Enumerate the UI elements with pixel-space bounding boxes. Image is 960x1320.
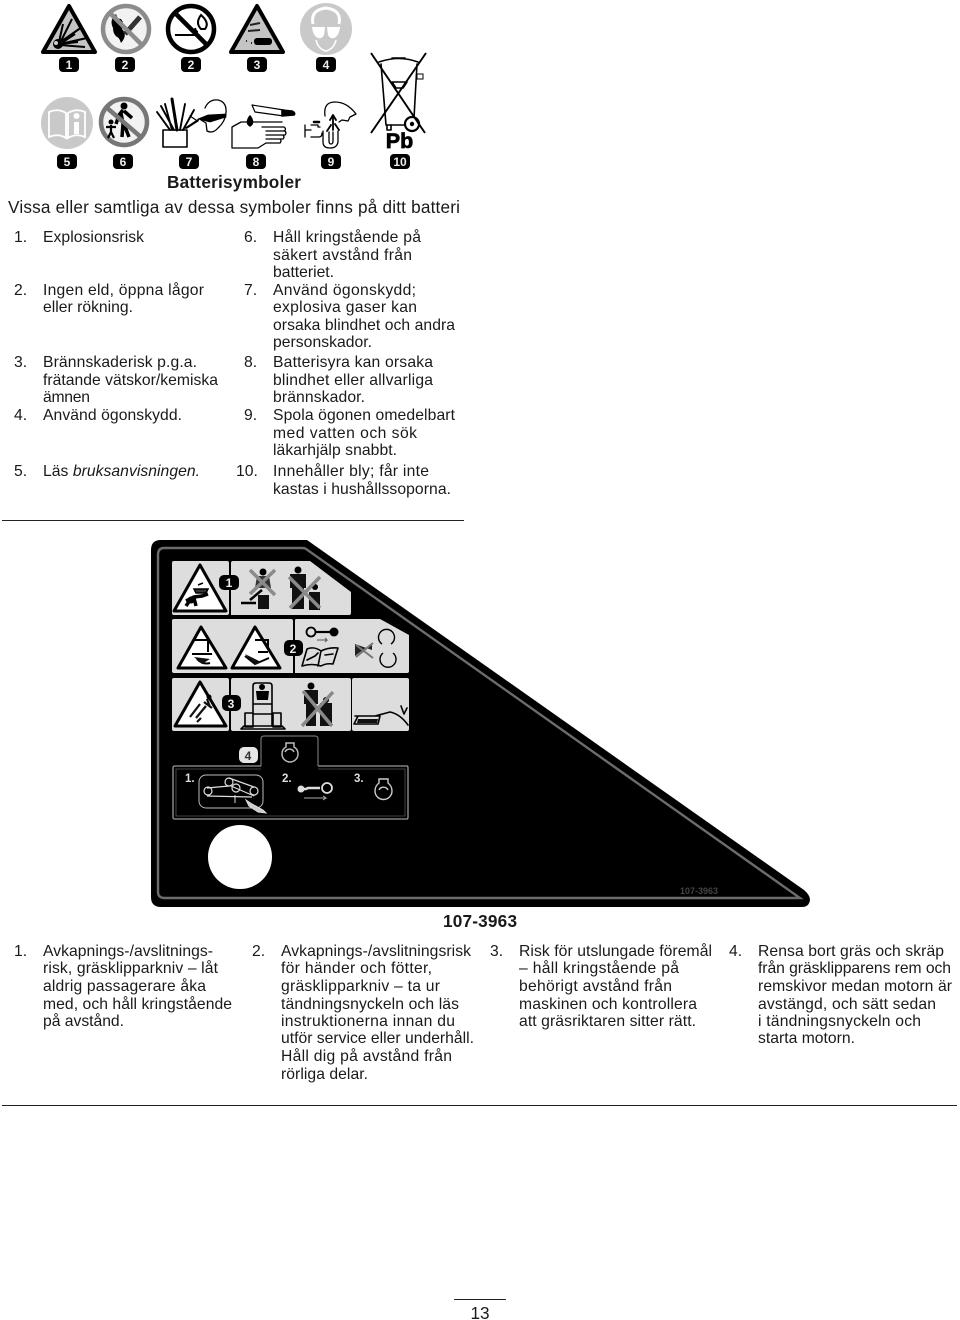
list: battery symbols right column: batteriet. <box>273 264 334 281</box>
decal list column 1: 1. <box>14 943 27 960</box>
decal list column 4: i tändningsnyckeln och <box>758 1013 921 1030</box>
decal list column 2 <box>252 943 474 1083</box>
badge row 2: 7 <box>186 155 193 169</box>
decal row 2 <box>172 619 409 673</box>
panel: decal 107-3963 <box>151 540 810 907</box>
decal row 3: 3 <box>228 697 235 711</box>
subheading: Vissa eller samtliga av dessa symboler finns på ditt batteri <box>8 197 460 217</box>
decal list column 3: Risk för utslungade föremål <box>519 942 712 960</box>
icon: acid burn on hand <box>232 105 295 148</box>
decal list column 2: Avkapnings-/avslitningsrisk <box>281 943 471 960</box>
decal list column 3: – håll kringstående på <box>519 959 679 977</box>
decal list column 1: Avkapnings-/avslitnings- <box>43 943 213 960</box>
list: battery symbols right column: säkert avstånd från <box>273 246 412 264</box>
badge row 1: 1 <box>66 58 73 72</box>
decal list column 2: Håll dig på avstånd från <box>281 1047 452 1065</box>
decal list column 3: att gräsriktaren sitter rätt. <box>519 1013 696 1030</box>
badge row 1: 2 <box>188 58 195 72</box>
list: battery symbols left column: Explosionsrisk <box>43 229 144 246</box>
list: battery symbols left column: 1. <box>14 229 27 246</box>
decal tab and badge 4 <box>239 736 318 766</box>
decal list column 3: 3. <box>490 943 503 960</box>
decal: starting instructions box: 2. <box>282 773 292 785</box>
list: battery symbols left column: Använd ögonskydd. <box>43 407 182 424</box>
list: battery symbols left column: 3. <box>14 354 27 371</box>
decal row 1 <box>172 561 351 615</box>
list: battery symbols left column: Ingen eld, öppna lågor <box>43 281 204 299</box>
list: battery symbols right column: med vatten och sök <box>273 425 417 442</box>
badge row 1: 4 <box>323 58 330 72</box>
list: battery symbols right column: orsaka blindhet och andra <box>273 317 455 334</box>
list: battery symbols right column: 6. <box>244 229 257 246</box>
icon: keep bystanders away <box>101 99 147 145</box>
heading: decal number: 107-3963 <box>443 911 517 931</box>
icon: no smoking circle <box>168 6 214 52</box>
list: battery symbols left column: 5. <box>14 463 27 480</box>
list: battery symbols right column: Håll kringstående på <box>273 228 421 246</box>
decal list column 1 <box>14 943 232 1030</box>
badge row 2: 9 <box>328 155 335 169</box>
list: battery symbols right column: 9. <box>244 407 257 424</box>
decal list column 4 <box>729 943 952 1047</box>
decal list column 4: starta motorn. <box>758 1030 855 1047</box>
list: battery symbols left column: Brännskaderisk p.g.a. <box>43 354 197 371</box>
decal list column 2: rörliga delar. <box>281 1066 368 1083</box>
icon: read manual <box>41 97 93 149</box>
list: battery symbols right column: personskador. <box>273 334 372 351</box>
list: battery symbols right column: brännskador. <box>273 389 365 406</box>
decal: starting instructions box <box>173 766 408 819</box>
icon: flush eyes with water <box>305 102 356 148</box>
badge row 1 <box>59 57 336 72</box>
list: battery symbols left column: eller rökning. <box>43 299 133 316</box>
icon: explosion risk triangle <box>43 6 95 52</box>
decal list column 2: 2. <box>252 943 265 960</box>
badge row 2: 5 <box>64 155 71 169</box>
list: battery symbols left column: frätande vätskor/kemiska <box>43 372 218 389</box>
icon: crossed out bin with Pb <box>371 53 426 153</box>
list: battery symbols right column: Använd ögonskydd; <box>273 282 416 299</box>
decal row 3 <box>172 678 409 731</box>
list: battery symbols right column: 10. <box>236 463 258 480</box>
badge row 2: 10 <box>393 155 407 169</box>
decal list column 3: behörigt avstånd från <box>519 977 672 995</box>
list: battery symbols right column: 7. <box>244 282 257 299</box>
icon: battery explosion and goggles <box>157 99 226 147</box>
decal list column 4: remskivor medan motorn är <box>758 978 952 995</box>
icon: corrosive triangle <box>231 6 283 52</box>
decal: starting instructions box: 3. <box>354 773 364 785</box>
decal list column 2: för händer och fötter, <box>281 960 432 977</box>
decal: starting instructions box: 1. <box>185 773 195 785</box>
badge row 1: 2 <box>122 58 129 72</box>
decal list column 3: maskinen och kontrollera <box>519 996 697 1013</box>
icon: crossed out bin with Pb: Pb <box>386 129 413 153</box>
list: battery symbols left column <box>14 229 218 480</box>
list: battery symbols left column: ämnen <box>43 389 90 406</box>
badge row 1: 3 <box>254 58 261 72</box>
decal tab and badge 4: 4 <box>245 749 252 763</box>
decal list column 2: instruktionerna innan du <box>281 1013 455 1030</box>
list: battery symbols right column: kastas i hushållssoporna. <box>273 480 451 498</box>
decal list column 4: avstängd, och sätt sedan <box>758 996 936 1013</box>
decal list column 2: tändningsnyckeln och läs <box>281 996 459 1013</box>
decal list column 1: på avstånd. <box>43 1012 124 1030</box>
decal: white circle <box>208 825 272 889</box>
decal row 1: 1 <box>226 576 233 590</box>
list: battery symbols right column: Batterisyra kan orsaka <box>273 354 433 371</box>
decal list column 1: aldrig passagerare åka <box>43 977 206 995</box>
decal part number: 107-3963 <box>680 886 718 896</box>
list: battery symbols right column: Innehåller bly; får inte <box>273 462 429 480</box>
decal list column 2: gräsklipparkniv – ta ur <box>281 978 440 995</box>
list: battery symbols right column: Spola ögonen omedelbart <box>273 407 456 424</box>
list: battery symbols left column: 2. <box>14 282 27 299</box>
decal list column 2: utför service eller underhåll. <box>281 1029 474 1047</box>
badge row 2: 6 <box>120 155 127 169</box>
decal list column 4: från gräsklipparens rem och <box>758 959 951 977</box>
icon: no open flame circle grey <box>103 6 149 52</box>
list: battery symbols right column: blindhet eller allvarliga <box>273 372 433 389</box>
icon: wear goggles <box>300 3 352 55</box>
list: battery symbols right column: explosiva gaser kan <box>273 299 417 316</box>
decal list column 4: 4. <box>729 943 742 960</box>
badge row 2 <box>57 154 410 169</box>
decal row 2: 2 <box>290 642 297 656</box>
decal list column 3 <box>490 942 712 1030</box>
decal list column 1: med, och håll kringstående <box>43 995 232 1013</box>
list: battery symbols left column: 4. <box>14 407 27 424</box>
list: battery symbols right column: läkarhjälp snabbt. <box>273 442 397 459</box>
decal list column 4: Rensa bort gräs och skräp <box>758 943 944 960</box>
list: battery symbols right column: 8. <box>244 354 257 371</box>
badge row 2: 8 <box>253 155 260 169</box>
list: battery symbols left column: Läs bruksanvisningen. <box>43 463 200 480</box>
heading: Batterisymboler: Batterisymboler <box>167 172 301 192</box>
list: battery symbols right column <box>236 228 456 498</box>
decal list column 1: risk, gräsklipparkniv – låt <box>43 959 219 977</box>
